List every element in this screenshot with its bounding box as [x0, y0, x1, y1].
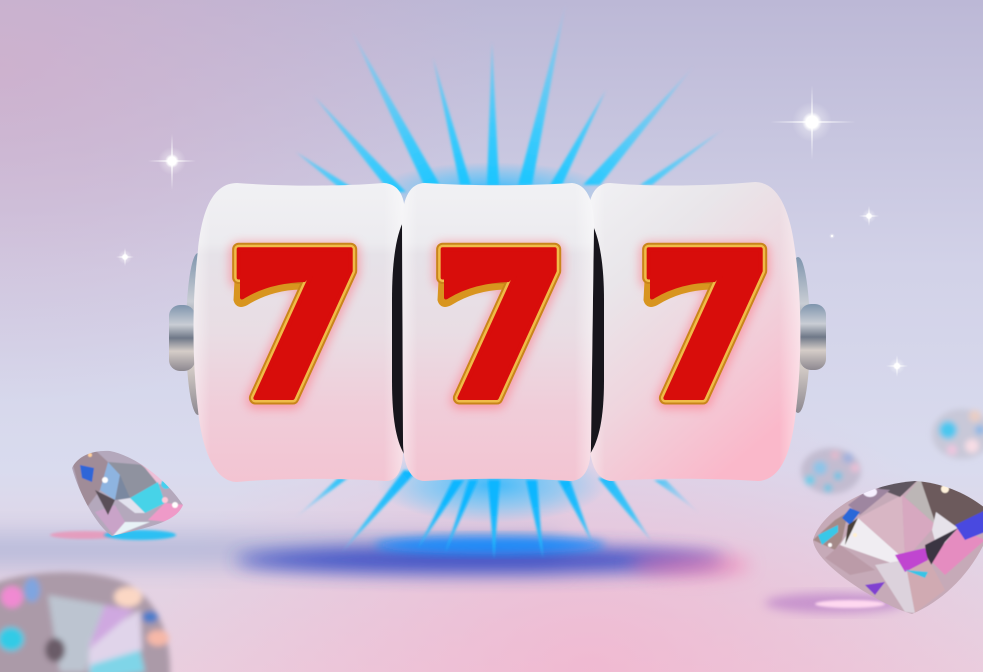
- floor shadow: [0, 535, 750, 576]
- reel 1: [194, 183, 405, 482]
- seven on reel 3: 7: [635, 210, 777, 447]
- diamond: far right blurred: [932, 409, 983, 459]
- seven on reel 2: 7: [429, 210, 571, 447]
- seven on reel 1: 7: [225, 210, 367, 447]
- reel 2: [402, 183, 594, 481]
- seven on reel 3: 7: [635, 210, 777, 447]
- left axle: [169, 253, 210, 415]
- seven on reel 2: 7: [429, 212, 571, 449]
- seven on reel 1: 7: [225, 212, 367, 449]
- blue light rays: [296, 2, 722, 559]
- diamond: left with reflection: [50, 445, 190, 540]
- seven on reel 1: 7: [225, 210, 367, 447]
- seven on reel 1: 7: [225, 210, 367, 447]
- seven on reel 3: 7: [635, 210, 777, 447]
- reel 3: [588, 182, 800, 481]
- seven on reel 2: 7: [429, 210, 571, 447]
- diamond: large right: [765, 475, 983, 620]
- diamond: small rear blurred: [801, 448, 861, 494]
- diamond: bottom-left foreground blurred: [0, 572, 170, 672]
- seven on reel 2: 7: [429, 210, 571, 447]
- right axle: [786, 257, 826, 413]
- seven on reel 3: 7: [635, 212, 777, 449]
- sparkles: [116, 85, 908, 377]
- dark gaps between reels: [392, 220, 604, 454]
